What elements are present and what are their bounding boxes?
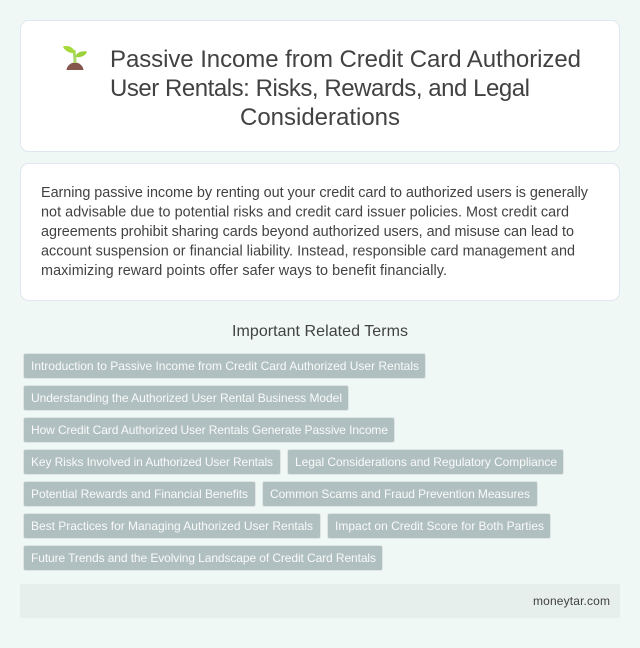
chip	[328, 514, 550, 538]
chip	[24, 418, 394, 442]
intro paragraph	[41, 185, 589, 279]
chip	[24, 386, 348, 410]
title	[110, 46, 581, 131]
chip	[24, 482, 256, 506]
related terms chips	[24, 354, 564, 570]
intro paragraph: agreements prohibit sharing cards beyond authorized users, and misuse can lead to	[41, 224, 574, 240]
chip	[24, 546, 382, 570]
footer bar	[20, 584, 620, 618]
chip: Potential Rewards and Financial Benefits	[31, 487, 248, 501]
chip	[24, 514, 320, 538]
chip: Introduction to Passive Income from Credit Card Authorized User Rentals	[31, 359, 419, 373]
chip	[262, 482, 538, 506]
chip: Impact on Credit Score for Both Parties	[335, 519, 544, 533]
chip: Common Scams and Fraud Prevention Measures	[270, 487, 530, 501]
footer source: moneytar.com	[533, 594, 610, 608]
chip: Legal Considerations and Regulatory Compliance	[295, 455, 557, 469]
intro paragraph: Earning passive income by renting out your credit card to authorized users is generally	[41, 185, 589, 201]
chip	[24, 354, 426, 378]
chip: Best Practices for Managing Authorized User Rentals	[31, 519, 313, 533]
chip	[24, 450, 280, 474]
chip: Key Risks Involved in Authorized User Rentals	[31, 455, 273, 469]
chip: How Credit Card Authorized User Rentals Generate Passive Income	[31, 423, 388, 437]
chip: Future Trends and the Evolving Landscape of Credit Card Rentals	[31, 551, 376, 565]
chip	[288, 450, 564, 474]
icon: seedling	[63, 46, 87, 70]
title: Considerations	[240, 104, 400, 131]
title: User Rentals: Risks, Rewards, and Legal	[110, 75, 530, 102]
chip: Understanding the Authorized User Rental Business Model	[31, 391, 342, 405]
title: Passive Income from Credit Card Authorized	[110, 46, 581, 73]
intro paragraph: maximizing reward points offer safer ways to benefit financially.	[41, 263, 447, 279]
intro paragraph: account suspension or financial liability. Instead, responsible card management and	[41, 244, 575, 260]
intro paragraph: not advisable due to potential risks and credit card issuer policies. Most credit card	[41, 204, 569, 220]
panel: title card	[20, 20, 620, 152]
heading: important related terms: Important Related Terms	[232, 323, 408, 340]
panel: intro text card	[20, 164, 620, 300]
